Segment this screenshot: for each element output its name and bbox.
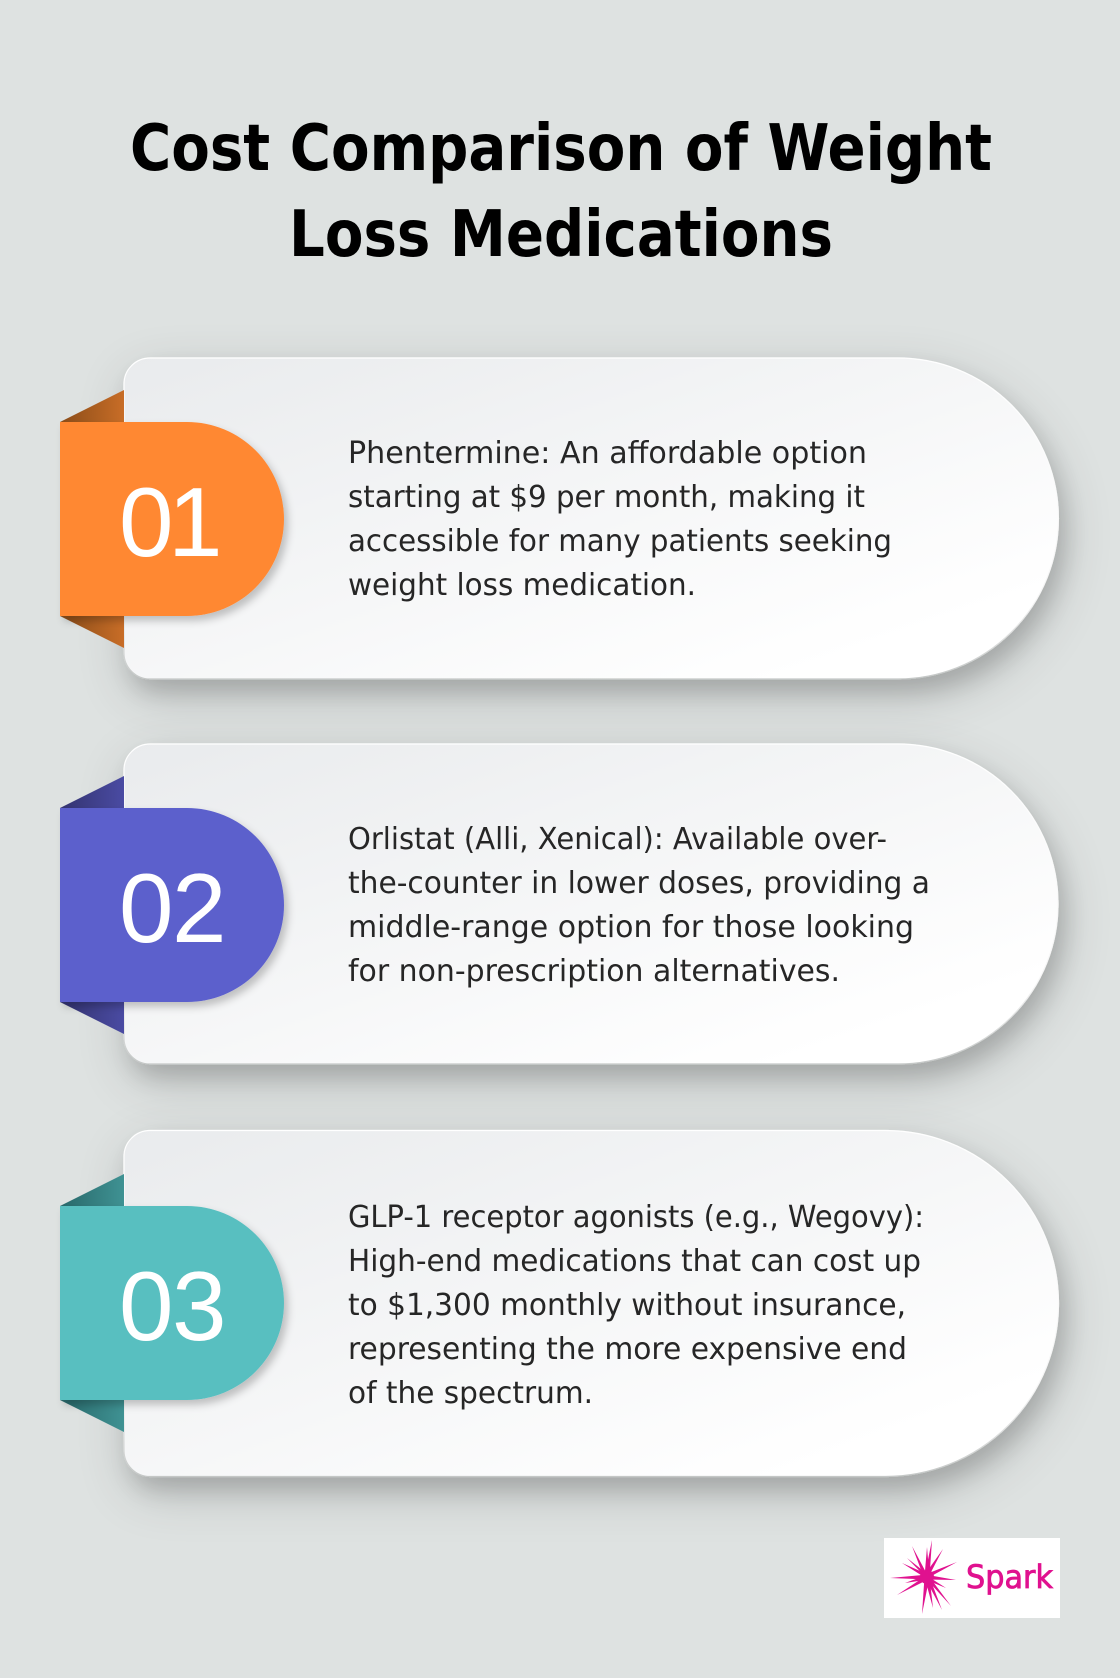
badge 01	[60, 422, 284, 616]
badge 02: 02	[119, 853, 227, 963]
text 03	[348, 1200, 924, 1411]
text 01: weight loss medication.	[348, 568, 696, 603]
badge 02	[60, 808, 284, 1002]
title	[130, 112, 992, 272]
card 02	[124, 744, 1058, 1064]
icon: starburst	[890, 1540, 957, 1614]
badge 01: 01	[119, 467, 223, 577]
ribbon fold: teal	[60, 1174, 124, 1432]
text 03: representing the more expensive end	[348, 1332, 907, 1367]
logo wordmark: Spark	[966, 1558, 1053, 1596]
text 02: for non-prescription alternatives.	[348, 954, 840, 989]
card 03	[124, 1130, 1058, 1476]
badge 03: 03	[119, 1251, 227, 1361]
text 03: of the spectrum.	[348, 1376, 593, 1411]
text 01: starting at $9 per month, making it	[348, 480, 865, 515]
text 02: Orlistat (Alli, Xenical): Available over-	[348, 822, 887, 857]
text 02: the-counter in lower doses, providing a	[348, 866, 930, 901]
text 02: middle-range option for those looking	[348, 910, 914, 945]
logo: Spark	[884, 1538, 1060, 1618]
text 02	[348, 822, 930, 989]
text 01: Phentermine: An affordable option	[348, 436, 867, 471]
text 03: GLP-1 receptor agonists (e.g., Wegovy):	[348, 1200, 924, 1235]
text 01: accessible for many patients seeking	[348, 524, 892, 559]
text 03: to $1,300 monthly without insurance,	[348, 1288, 906, 1323]
title: Cost Comparison of Weight	[130, 112, 992, 186]
ribbon fold: orange	[60, 390, 124, 648]
badge 03	[60, 1206, 284, 1400]
title: Loss Medications	[289, 198, 833, 272]
ribbon fold: indigo	[60, 776, 124, 1034]
text 03: High-end medications that can cost up	[348, 1244, 921, 1279]
text 01	[348, 436, 892, 603]
panel: item 02 Orlistat	[60, 744, 1058, 1064]
panel: item 01 Phentermine	[60, 358, 1058, 679]
card 01	[124, 358, 1058, 679]
panel: item 03 GLP-1	[60, 1130, 1058, 1476]
